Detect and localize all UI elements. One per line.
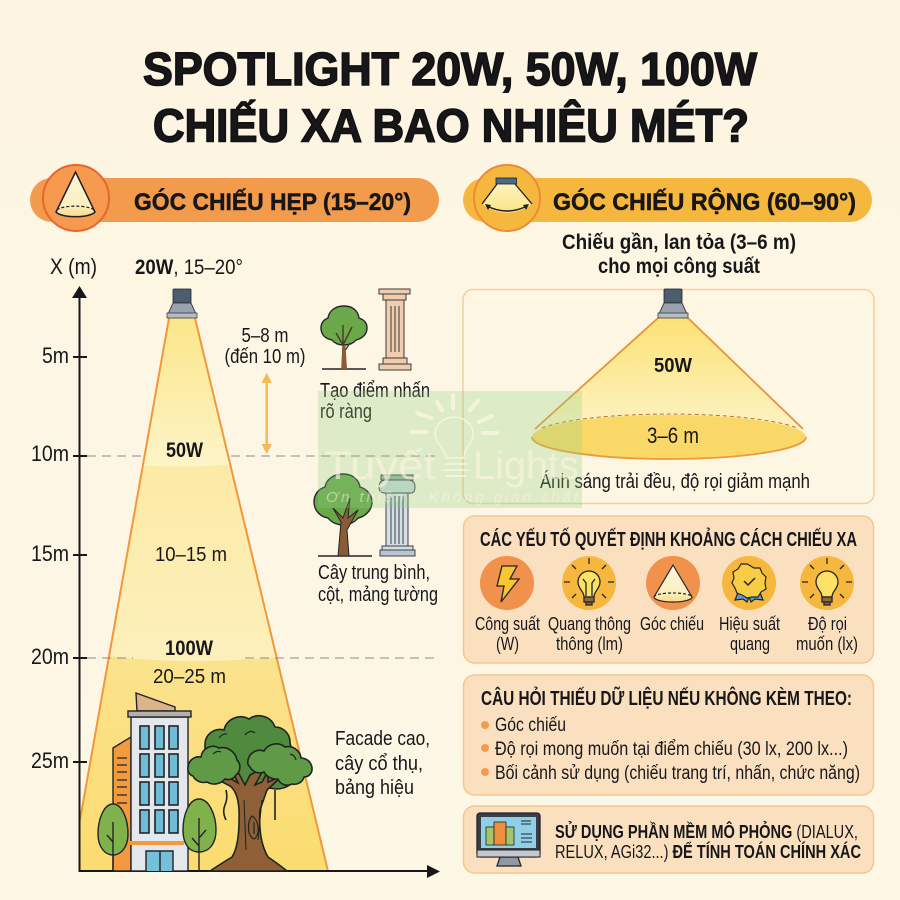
heading: wide beam bbox=[463, 165, 872, 231]
factor labels: Độ rọi bbox=[808, 614, 847, 634]
beam labels: 100W bbox=[165, 637, 213, 660]
subheading: wide beam bbox=[562, 231, 796, 278]
heading: narrow beam: GÓC CHIẾU HẸP (15–20°) bbox=[134, 188, 411, 216]
axis labels: X (m) bbox=[50, 254, 97, 279]
text: accent: Tạo điểm nhấn bbox=[320, 380, 430, 402]
text: accent: rõ ràng bbox=[320, 401, 372, 423]
factor labels: (W) bbox=[496, 634, 519, 654]
text: medium targets bbox=[318, 562, 438, 606]
watermark: Tuyết bbox=[324, 444, 436, 488]
title: CHIẾU XA BAO NHIÊU MÉT? bbox=[153, 100, 749, 152]
wide light cone bbox=[532, 318, 806, 459]
icon: small trees bbox=[98, 799, 216, 871]
subheading: wide beam: Chiếu gần, lan tỏa (3–6 m) bbox=[562, 231, 796, 254]
axes bbox=[72, 286, 440, 878]
icon: efficacy badge bbox=[722, 556, 776, 610]
panel: missing data: Độ rọi mong muốn tại điểm chiếu (30 lx, 200 lx...) bbox=[495, 739, 848, 760]
title bbox=[143, 43, 758, 152]
icon: banyan tree bbox=[188, 716, 312, 871]
icon: monitor bbox=[477, 813, 540, 866]
panel: software bbox=[464, 806, 874, 873]
factor labels: thông (lm) bbox=[556, 634, 623, 654]
factor labels: Quang thông bbox=[548, 614, 631, 634]
panel: software: RELUX, AGi32...) ĐỂ TÍNH TOÁN CHÍNH XÁC bbox=[555, 841, 861, 862]
beam labels: 10–15 m bbox=[155, 544, 227, 566]
axis labels: 15m bbox=[31, 541, 69, 566]
heading: narrow beam bbox=[30, 165, 439, 231]
panel: software: SỬ DỤNG PHẦN MỀM MÔ PHỎNG (DIALUX, bbox=[555, 821, 858, 842]
icon: office building bbox=[113, 693, 191, 871]
beam labels: 50W bbox=[166, 439, 203, 462]
watermark: Lights bbox=[473, 444, 579, 488]
title: SPOTLIGHT 20W, 50W, 100W bbox=[143, 43, 758, 95]
text: medium targets: cột, mảng tường bbox=[318, 584, 438, 606]
icon: beam angle bbox=[646, 556, 700, 610]
text: tall targets: bảng hiệu bbox=[335, 777, 414, 799]
arrow: 5-10 m range bbox=[262, 373, 272, 454]
axis labels: 20m bbox=[31, 644, 69, 669]
factor labels: Hiệu suất bbox=[719, 614, 780, 634]
axis labels: 10m bbox=[31, 441, 69, 466]
panel: missing data: Góc chiếu bbox=[495, 715, 566, 736]
label: 5-8 m: (đến 10 m) bbox=[224, 346, 306, 368]
text: tall targets: Facade cao, bbox=[335, 728, 430, 750]
factor labels: quang bbox=[730, 634, 770, 654]
factor labels: Công suất bbox=[475, 614, 540, 634]
heading: wide beam: GÓC CHIẾU RỘNG (60–90°) bbox=[553, 188, 856, 216]
icon: medium tree bbox=[314, 474, 372, 556]
axis labels: 5m bbox=[42, 343, 69, 368]
icon: grey column bbox=[379, 475, 415, 556]
label: 5-8 m bbox=[224, 325, 306, 368]
axis labels: 25m bbox=[31, 748, 69, 773]
dashed level lines bbox=[87, 456, 440, 658]
watermark: Ơn thiện - Không gian chất bbox=[326, 489, 579, 506]
panel: wide beam: 50W bbox=[654, 355, 692, 377]
lamp: wide bbox=[658, 289, 688, 318]
panel: missing data bbox=[464, 675, 874, 795]
text: medium targets: Cây trung bình, bbox=[318, 562, 430, 584]
watermark bbox=[318, 391, 582, 508]
factor labels bbox=[475, 614, 858, 654]
icon: luminous flux bbox=[562, 556, 616, 610]
axis labels bbox=[31, 254, 97, 773]
icon: small tree bbox=[321, 306, 367, 369]
label: 5-8 m: 5–8 m bbox=[242, 325, 288, 347]
subheading: wide beam: cho mọi công suất bbox=[598, 255, 760, 278]
lamp: narrow bbox=[167, 289, 197, 318]
icon: beige pillar bbox=[379, 289, 411, 370]
beam labels bbox=[153, 439, 227, 688]
icon: wide lamp bbox=[482, 178, 532, 213]
icon: cone bbox=[56, 172, 95, 217]
text: accent bbox=[320, 380, 430, 423]
panel: wide beam bbox=[463, 289, 874, 504]
icon: power bbox=[480, 556, 534, 610]
light beam bbox=[80, 318, 330, 871]
icon: illuminance bbox=[800, 556, 854, 610]
beam labels: 20–25 m bbox=[153, 666, 226, 688]
label: 20W: 20W, 15–20° bbox=[135, 256, 243, 279]
text: tall targets: cây cổ thụ, bbox=[335, 753, 423, 775]
panel: factors bbox=[464, 516, 874, 663]
factor labels: Góc chiếu bbox=[640, 614, 704, 634]
text: tall targets bbox=[335, 728, 430, 799]
panel: wide beam: 3–6 m bbox=[647, 423, 699, 448]
factor labels: muốn (lx) bbox=[796, 634, 858, 654]
panel: wide beam: Ánh sáng trải đều, độ rọi giảm mạnh bbox=[540, 470, 810, 493]
